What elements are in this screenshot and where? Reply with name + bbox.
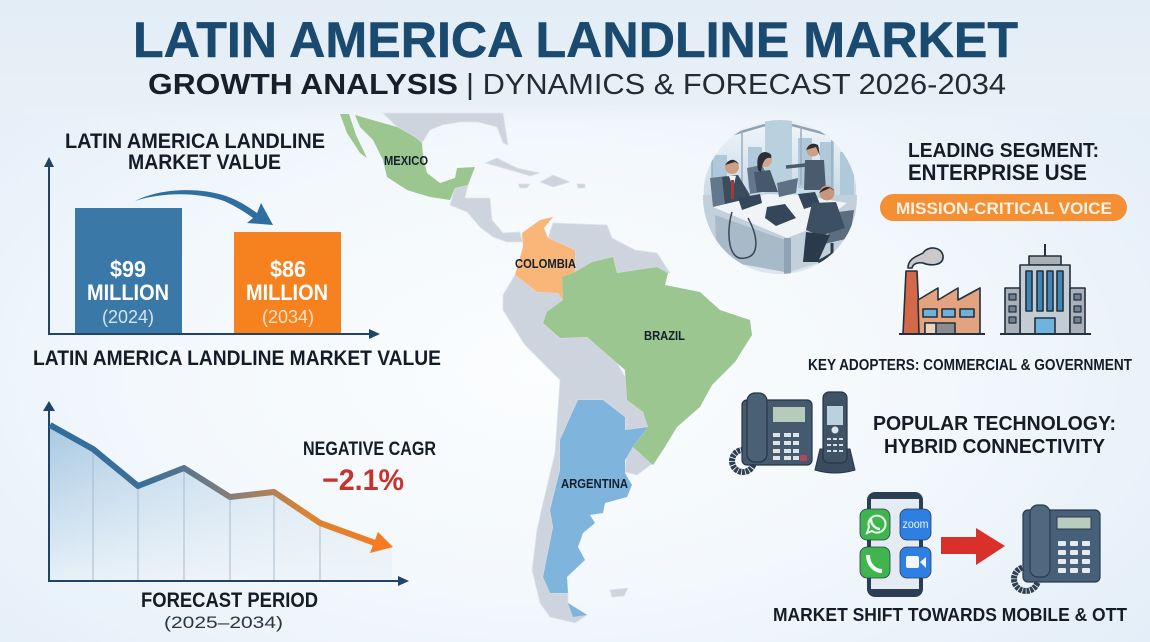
icon: office building: [1000, 244, 1091, 334]
people: [710, 144, 826, 207]
heading: market value: [65, 130, 325, 174]
bar: 2034: MILLION: [246, 280, 328, 305]
arrow: decline between bars: [135, 190, 273, 225]
bar: 2034: (2034): [262, 307, 314, 327]
map labels: ARGENTINA: [561, 476, 629, 491]
caption: forecast period: (2025–2034): [164, 613, 283, 632]
telephone cord: [729, 212, 756, 258]
subtitle: GROWTH ANALYSIS: [148, 69, 458, 101]
callout: negative CAGR: −2.1%: [322, 464, 404, 497]
title: LATIN AMERICA LANDLINE MARKET: [133, 12, 1018, 68]
icon: factory: [899, 248, 985, 334]
map labels: [384, 153, 685, 491]
bar: 2024: $99: [110, 256, 146, 282]
callout: negative CAGR: [303, 439, 436, 497]
header band: [0, 0, 1150, 122]
bar: 2034: $86: [270, 256, 306, 282]
map: Mexico: [340, 114, 475, 200]
illustration: office meeting: [700, 118, 860, 276]
map labels: COLOMBIA: [515, 256, 577, 271]
arrow: shift: [941, 528, 1005, 565]
callout: negative CAGR: NEGATIVE CAGR: [303, 439, 436, 460]
heading: popular technology: POPULAR TECHNOLOGY:: [873, 413, 1116, 435]
pill: mission-critical voice: [880, 194, 1127, 221]
map: Latin America: [340, 113, 752, 623]
heading: popular technology: HYBRID CONNECTIVITY: [884, 436, 1106, 458]
heading: market value: LATIN AMERICA LANDLINE: [65, 130, 325, 153]
map: Colombia: [515, 217, 575, 300]
heading: leading segment: [908, 140, 1099, 185]
panel: forecast line chart: [43, 401, 436, 632]
heading: leading segment: ENTERPRISE USE: [908, 160, 1087, 185]
heading: market value: MARKET VALUE: [128, 151, 281, 174]
pill: mission-critical voice: MISSION-CRITICAL VOICE: [896, 199, 1112, 218]
map: Brazil: [543, 257, 752, 465]
caption: forecast period: FORECAST PERIOD: [141, 589, 318, 612]
bar: 2024: MILLION: [87, 280, 169, 305]
bar: 2024: [75, 208, 182, 334]
icon: landline telephone: [1014, 505, 1100, 591]
conference table: [715, 215, 785, 272]
map labels: MEXICO: [384, 153, 428, 168]
heading: leading segment: LEADING SEGMENT:: [908, 140, 1099, 162]
app: Zoom: zoom: [902, 517, 929, 531]
declining trend line: [50, 425, 393, 553]
app: WhatsApp: [860, 509, 890, 540]
caption: market shift: MARKET SHIFT TOWARDS MOBILE & OTT: [773, 605, 1127, 625]
desk phones: [738, 192, 820, 226]
axes: [43, 401, 409, 586]
floor: [744, 263, 819, 274]
axes: [44, 157, 380, 339]
caption: market value: LATIN AMERICA LANDLINE MARKET VALUE: [33, 347, 441, 370]
grid lines: [93, 449, 320, 581]
bar: 2034: [234, 232, 341, 334]
icon: smartphone with apps: [860, 492, 931, 597]
app: phone: [860, 547, 890, 578]
laptop: [777, 178, 798, 197]
caption: forecast period: [141, 589, 318, 632]
subtitle: | DYNAMICS & FORECAST 2026-2034: [466, 69, 1006, 101]
panel: market value bar chart: [33, 130, 441, 370]
subtitle: [148, 69, 1006, 101]
app: video: [900, 547, 931, 578]
bar: 2024: (2024): [102, 307, 154, 327]
map: Argentina: [543, 400, 648, 617]
icon: desk phone and cordless handset: [732, 392, 855, 473]
area under line: [50, 425, 392, 581]
map labels: BRAZIL: [644, 328, 685, 343]
map: neighbouring countries in grey: [383, 113, 670, 623]
heading: popular technology: [873, 413, 1116, 458]
seated man and chair: [803, 186, 854, 262]
